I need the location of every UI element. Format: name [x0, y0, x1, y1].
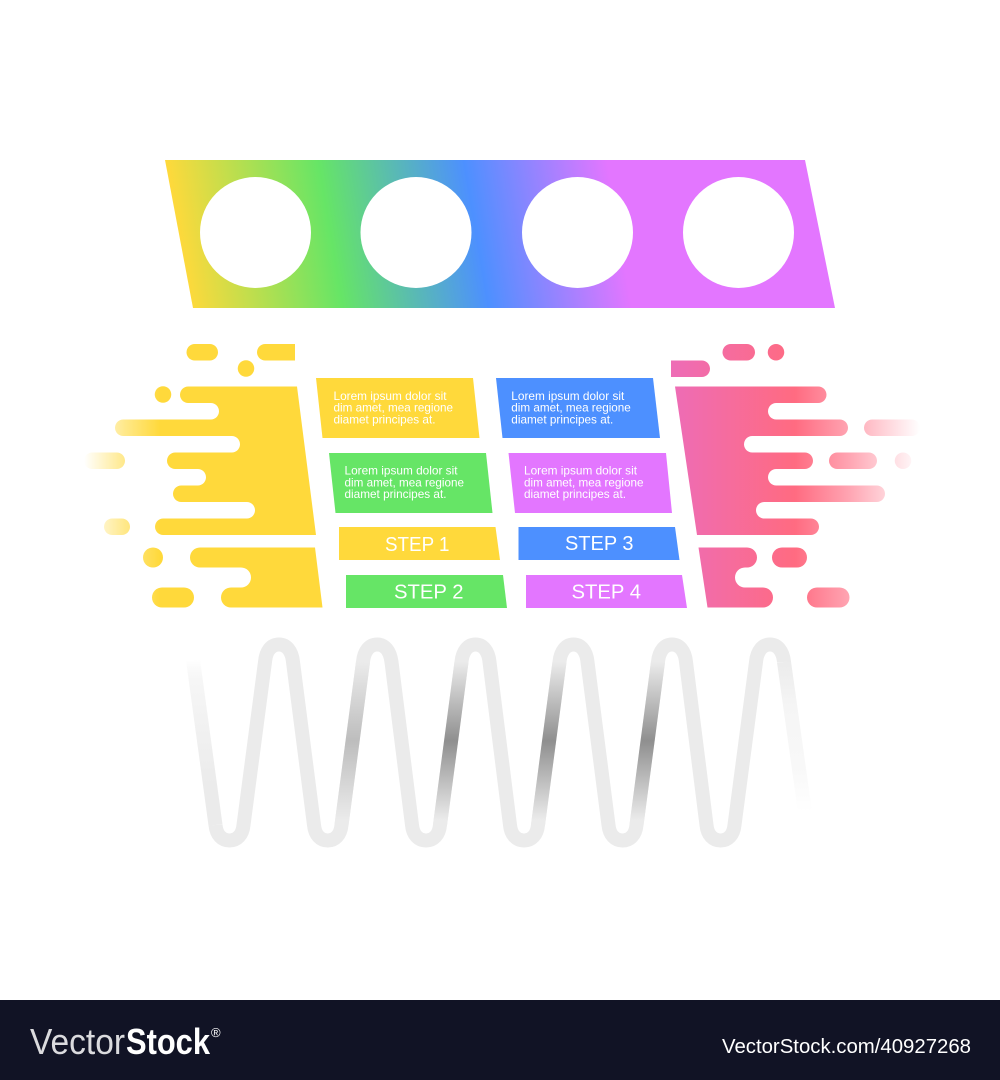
step 3 label: STEP 3 [565, 532, 634, 555]
grey spring wave [193, 644, 805, 840]
circle 2 [360, 177, 472, 288]
footer url: VectorStock.com/40927268 [722, 1036, 971, 1058]
text card: blue [496, 378, 660, 438]
step 4 label: STEP 4 [572, 580, 641, 604]
step 2 label: STEP 2 [394, 581, 464, 604]
top gradient band with four circles [165, 160, 835, 308]
text card: blue: diamet principes at. [511, 412, 613, 426]
step 1 label: STEP 1 [385, 533, 450, 556]
text card: purple: Lorem ipsum dolor sit [524, 464, 638, 478]
circle 1 [200, 177, 311, 288]
circle 3 [522, 177, 633, 288]
text card: purple: diamet principes at. [524, 487, 626, 501]
text card: yellow: diamet principes at. [334, 412, 436, 426]
footer bar [0, 1000, 1000, 1080]
text card: green [329, 453, 492, 513]
right fading end [784, 662, 805, 812]
registered mark: ® [211, 1025, 221, 1040]
text card: purple: dim amet, mea regione [524, 475, 644, 489]
pink speed shape, right [671, 344, 920, 608]
text card: green: dim amet, mea regione [344, 475, 464, 489]
highlighted strand 4 [636, 662, 658, 825]
footer logo: Vector: Vector [30, 1021, 125, 1062]
highlighted strand 1 [342, 662, 363, 825]
step 4 label [526, 575, 687, 608]
step 1 label [339, 527, 500, 560]
text card: blue: Lorem ipsum dolor sit [511, 389, 625, 403]
circle 4 [683, 177, 794, 288]
text card: yellow: dim amet, mea regione [334, 401, 453, 415]
yellow speed shape, left [84, 344, 322, 608]
text card: green: diamet principes at. [344, 487, 446, 501]
text card: purple [508, 453, 672, 513]
highlighted strand 2 [440, 662, 462, 825]
text card: yellow: Lorem ipsum dolor sit [334, 389, 447, 403]
text card: green: Lorem ipsum dolor sit [344, 464, 458, 478]
text card: blue: dim amet, mea regione [511, 401, 631, 415]
text card: yellow [316, 378, 480, 438]
footer logo: Stock: Stock [126, 1021, 211, 1062]
step 2 label [346, 575, 507, 608]
step 3 label [518, 527, 680, 560]
highlighted strand 3 [538, 662, 560, 825]
left fading end [193, 660, 216, 825]
